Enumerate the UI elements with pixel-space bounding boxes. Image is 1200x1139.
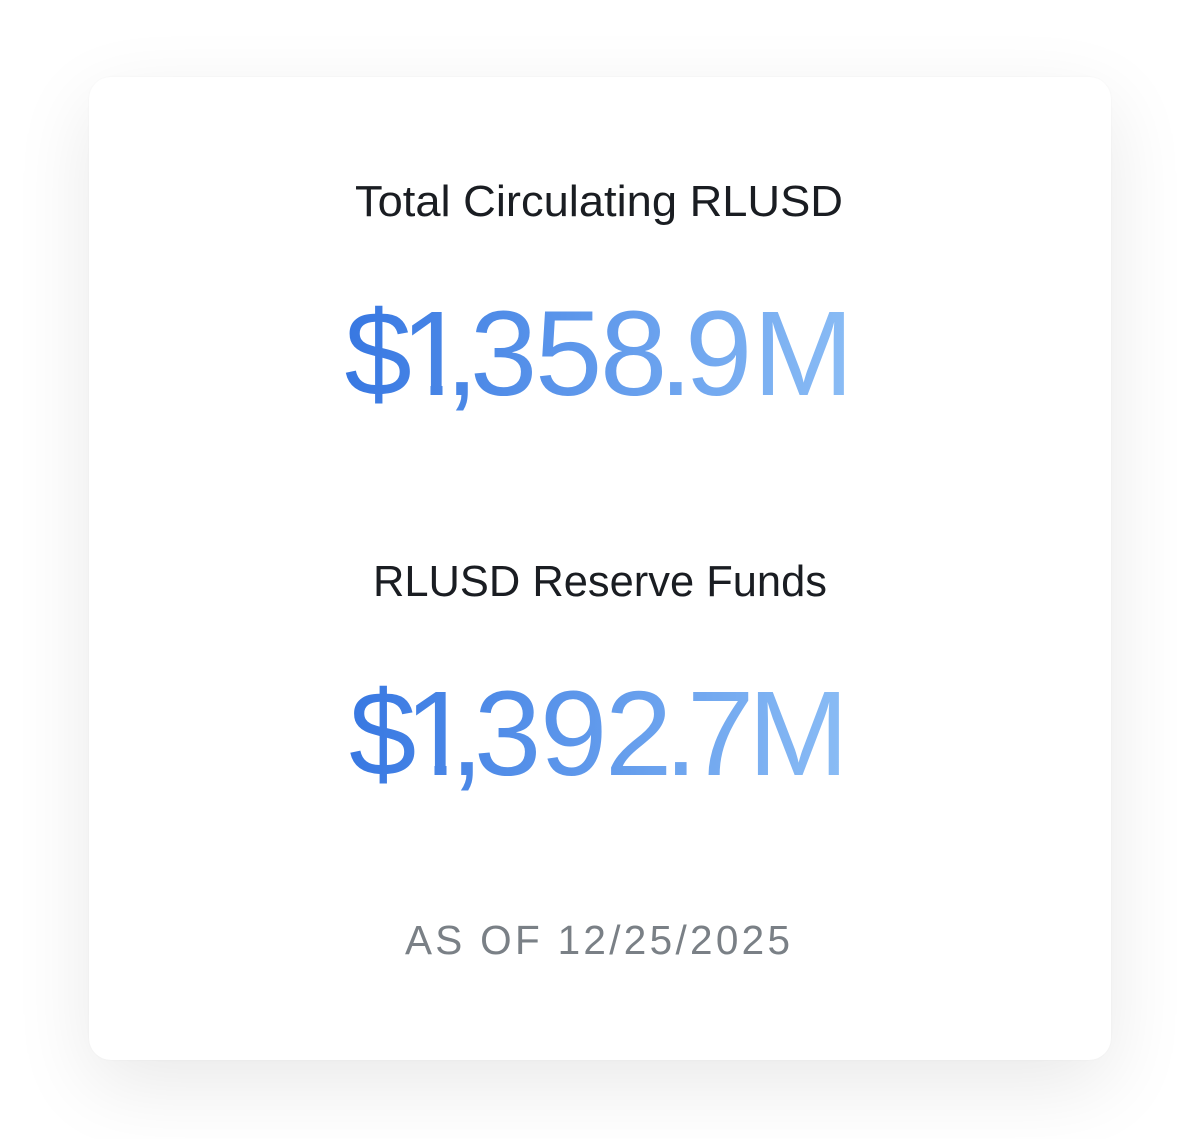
metric: reserve funds value: $: [349, 665, 416, 801]
metric: total circulating value: ,358.9M: [445, 285, 854, 421]
metric: total circulating value: 1: [400, 285, 468, 421]
card text content: [346, 184, 844, 954]
panel: reserve card: [89, 77, 1111, 1060]
metric: total circulating value: $: [344, 285, 412, 421]
metric: total circulating value: [346, 306, 844, 410]
heading: RLUSD reserve funds: RLUSD Reserve Funds: [373, 557, 827, 606]
metric: reserve funds value: [350, 686, 839, 790]
metric: reserve funds value: ,392.7M: [450, 665, 849, 801]
date note: AS OF 12/25/2025: [405, 917, 790, 963]
metric: reserve funds value: 1: [404, 665, 472, 801]
heading: total circulating RLUSD: Total Circulating RLUSD: [355, 177, 843, 226]
